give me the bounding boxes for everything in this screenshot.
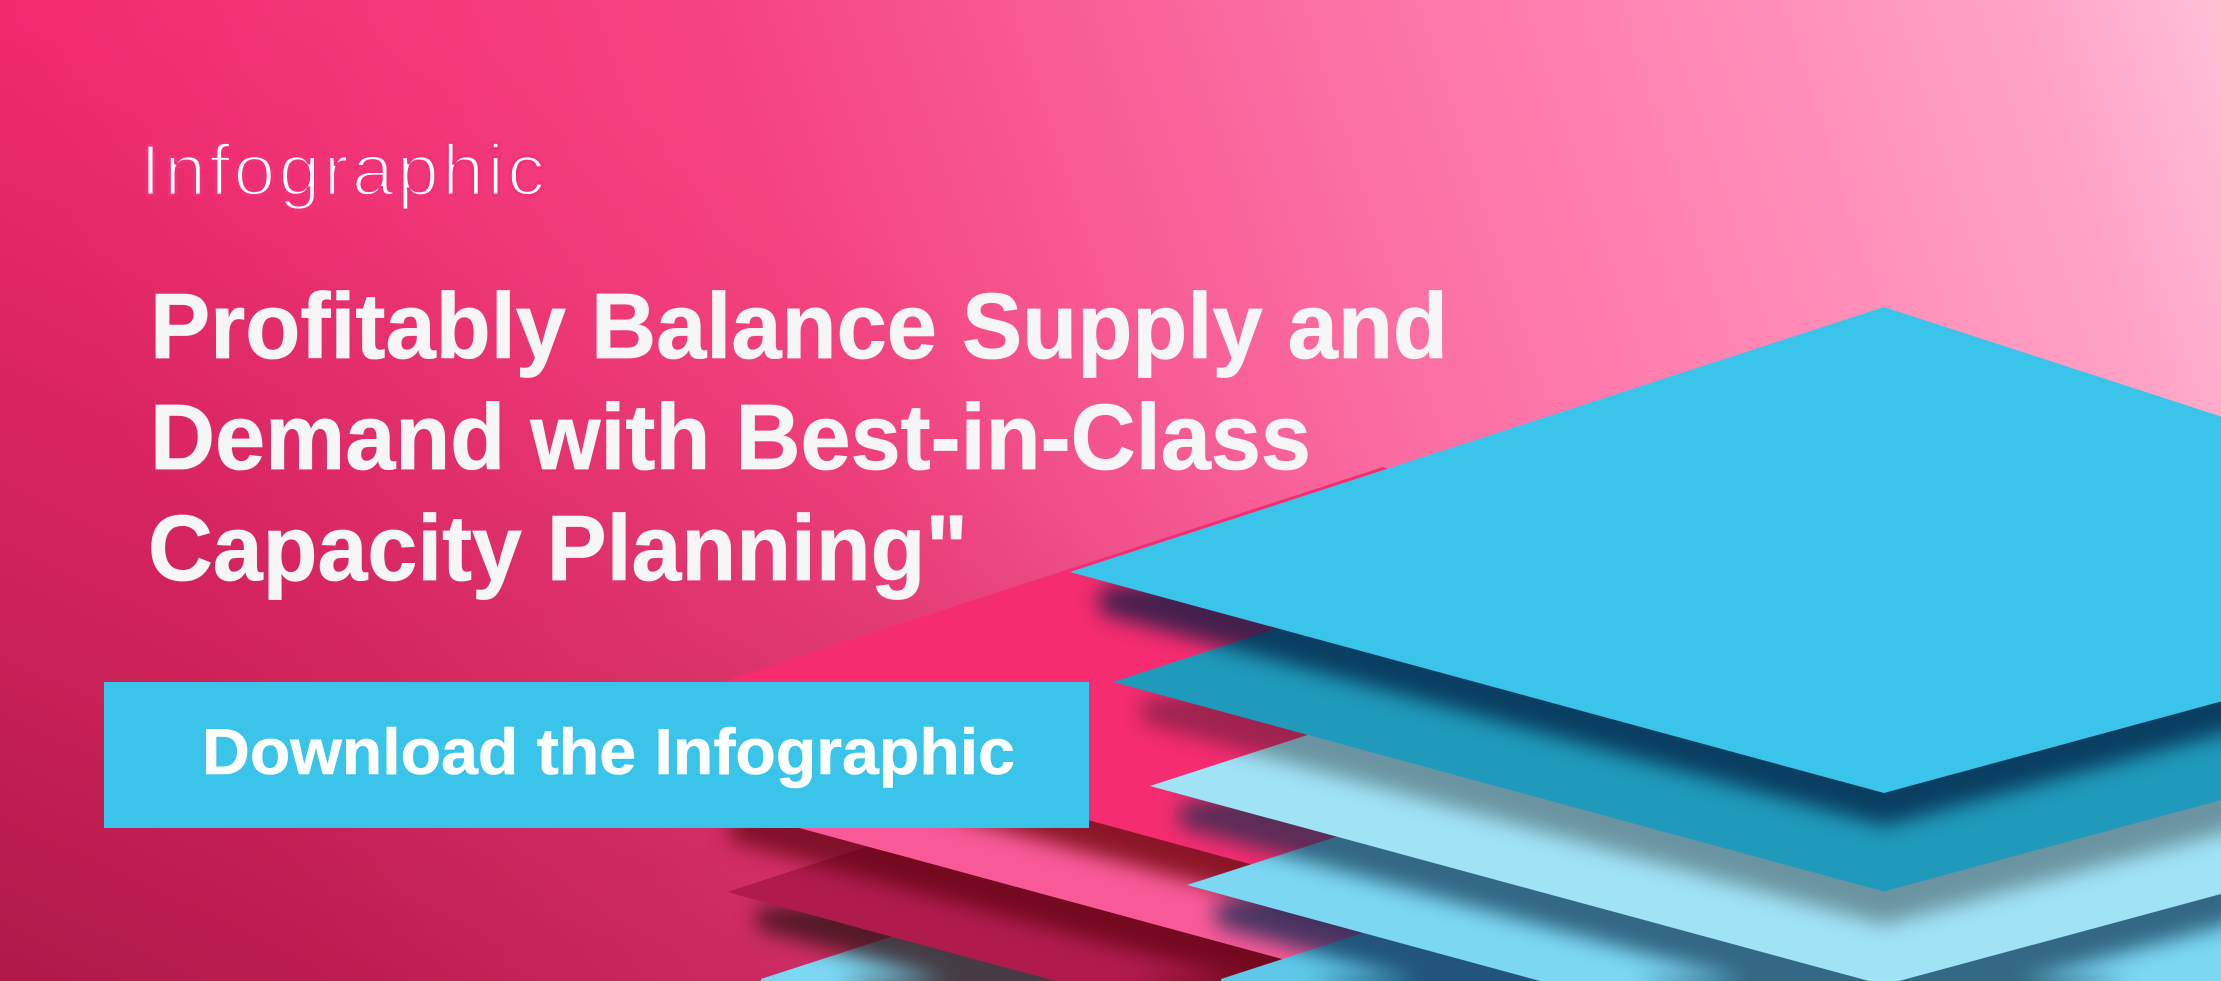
shadow of top blue sheet (1100, 500, 2221, 826)
shadow of sheet three (1180, 700, 2221, 981)
sheet three, pale blue (1150, 548, 2221, 981)
headline: Capacity Planning" (148, 496, 968, 600)
shadow of top pink sheet (687, 600, 1500, 965)
pink layer stack (657, 467, 1700, 981)
headline: Demand with Best-in-Class (150, 385, 1311, 489)
download button (104, 682, 1089, 828)
shadow of mid pink sheet (730, 700, 1700, 981)
deep pink sheet (727, 706, 1500, 981)
shadow of sheet four (1217, 800, 2221, 981)
sheet two, teal (1113, 431, 2221, 892)
shadow of sheet two (1143, 600, 2221, 924)
eyebrow label: Infographic (140, 131, 548, 211)
top blue sheet (1070, 307, 2221, 793)
shadow of deep pink sheet (757, 880, 1500, 981)
headline (148, 274, 1448, 600)
sheet four, sky blue (1187, 660, 2221, 981)
headline: Profitably Balance Supply and (150, 274, 1448, 378)
bottom sky sheet (761, 869, 1100, 981)
blue layer stack (1070, 307, 2221, 981)
sheet five, deep blue (1221, 764, 2221, 981)
top pink sheet (657, 467, 1600, 932)
mid pink sheet (700, 606, 1700, 981)
download button: Download the Infographic (202, 715, 1015, 788)
